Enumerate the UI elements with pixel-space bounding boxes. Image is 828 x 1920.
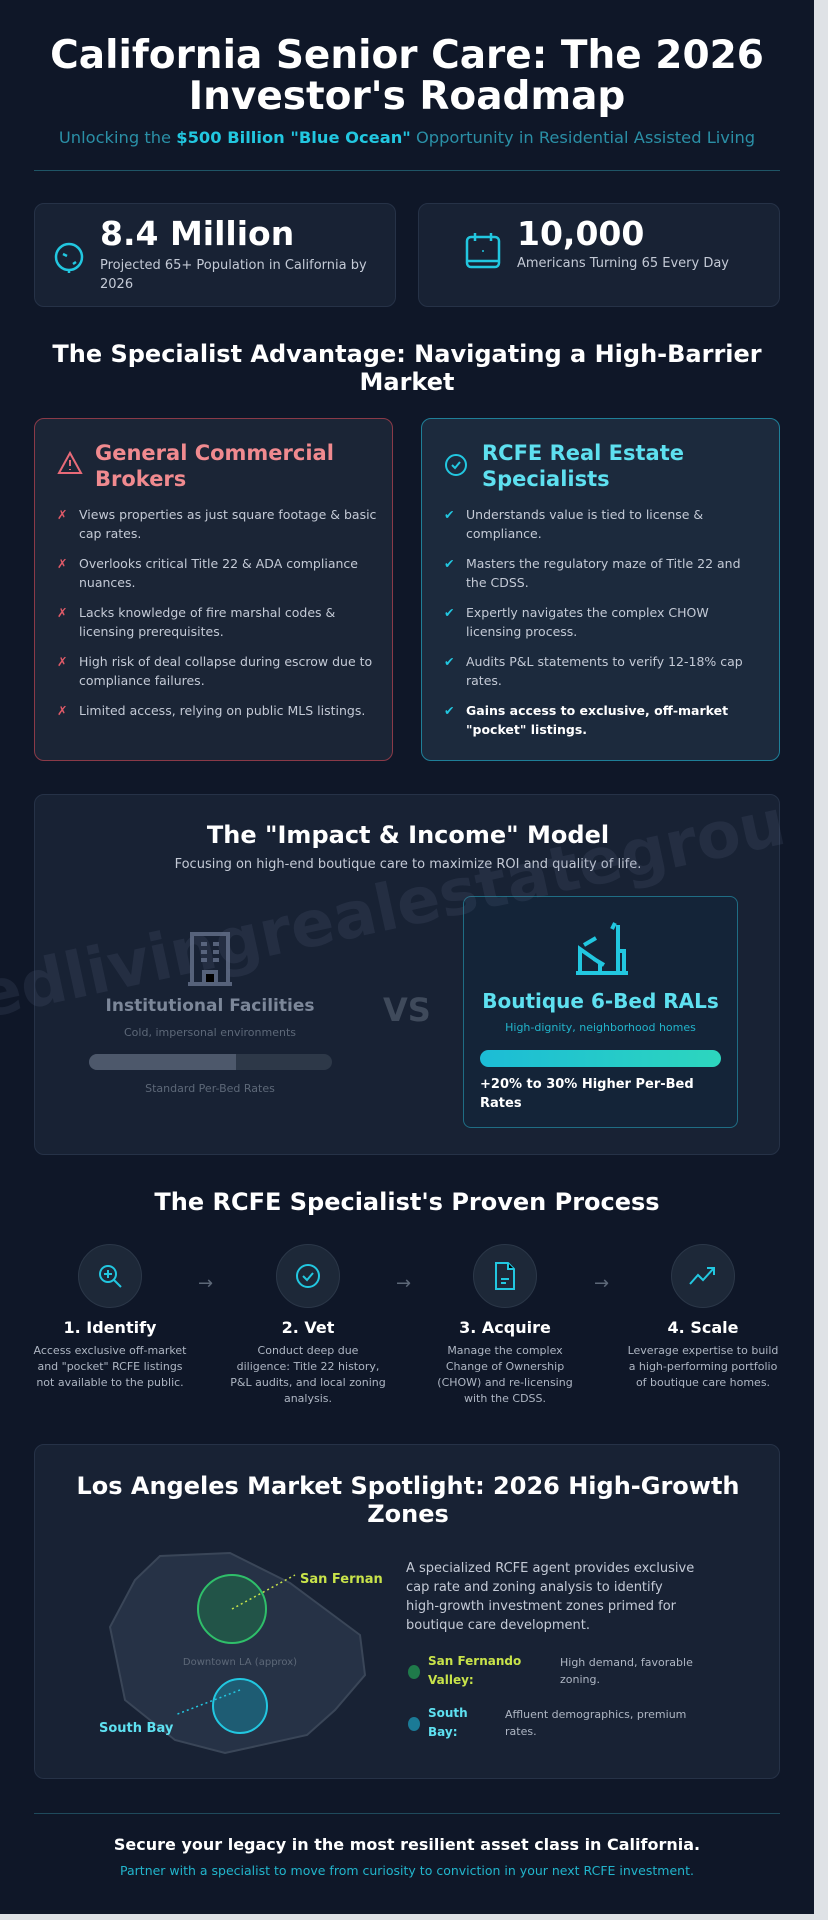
list: broker weaknesses: ✗ — [57, 605, 67, 620]
arrow: → — [198, 1273, 213, 1294]
panel: impact & income — [34, 794, 780, 1155]
title: California Senior Care: The 2026 — [50, 33, 764, 78]
legend: San Fernando — [428, 1654, 521, 1668]
list: specialist strengths: Gains access to exclusive, off-market "pocket" listings. — [466, 703, 728, 737]
icon: check circle — [445, 454, 467, 476]
step 3 acquire: Change of Ownership — [446, 1360, 564, 1373]
step 1 identify: not available to the public. — [36, 1376, 184, 1389]
list: specialist strengths: ✔ — [444, 703, 454, 718]
list: broker weaknesses: Limited access, relying on public MLS listings. — [79, 703, 365, 718]
step 1 identify: and "pocket" RCFE listings — [37, 1360, 183, 1373]
step 3 acquire: with the CDSS. — [464, 1392, 546, 1405]
step 4 scale: 4. Scale — [668, 1318, 738, 1337]
map: South Bay — [99, 1721, 174, 1736]
callout: boutique 6-bed: High-dignity, neighborhood homes — [505, 1021, 696, 1034]
legend: zoning. — [560, 1673, 600, 1686]
heading: specialist advantage: The Specialist Advantage: Navigating a High-Barrier — [52, 340, 762, 368]
heading: impact model: The "Impact & Income" Model — [207, 821, 609, 849]
step 3 acquire: 3. Acquire — [459, 1318, 551, 1337]
step 3 acquire: Manage the complex — [447, 1344, 563, 1357]
legend: South — [428, 1706, 468, 1720]
step 4 scale: of boutique care homes. — [636, 1376, 770, 1389]
heading: specialist advantage: Market — [360, 368, 454, 396]
list: broker weaknesses: ✗ — [57, 556, 67, 571]
step 1 identify: 1. Identify — [64, 1318, 156, 1337]
icon: building — [188, 932, 232, 986]
institutional facilities: Institutional Facilities — [106, 996, 314, 1016]
icon: trend — [671, 1244, 735, 1308]
list: broker weaknesses: Views properties as just square footage & basic cap rates. — [79, 507, 376, 541]
list: broker weaknesses: Overlooks critical Title 22 & ADA compliance nuances. — [79, 556, 358, 590]
footer text: Secure your legacy in the most resilient asset class in California. — [114, 1835, 700, 1854]
list: specialist strengths: ✔ — [444, 605, 454, 620]
stat card: 10,000: 10,000 — [517, 214, 644, 253]
icon: chart house — [576, 922, 628, 975]
list: specialist strengths: ✔ — [444, 556, 454, 571]
map: Downtown LA (approx) — [183, 1657, 297, 1668]
text: LA description: boutique care development. — [406, 1618, 590, 1633]
text: LA description — [406, 1561, 694, 1633]
step 3 acquire: (CHOW) and re-licensing — [437, 1376, 573, 1389]
legend: rates. — [505, 1725, 537, 1738]
list: broker weaknesses: ✗ — [57, 654, 67, 669]
vs: VS — [383, 991, 431, 1029]
step 2 vet: diligence: Title 22 history, — [237, 1360, 379, 1373]
step 2 vet — [230, 1244, 386, 1405]
list: broker weaknesses: ✗ — [57, 703, 67, 718]
panel: RCFE specialists — [421, 418, 780, 761]
legend: Affluent demographics, premium — [505, 1708, 686, 1721]
icon: search — [78, 1244, 142, 1308]
legend: Bay: — [428, 1725, 458, 1739]
step 4 scale: Leverage expertise to build — [628, 1344, 778, 1357]
list: specialist strengths: Masters the regulatory maze of Title 22 and the CDSS. — [466, 556, 741, 590]
step 4 scale — [628, 1244, 778, 1389]
text: LA description: cap rate and zoning analysis to identify — [406, 1580, 663, 1595]
step 1 identify: Access exclusive off-market — [34, 1344, 186, 1357]
heading: LA spotlight — [76, 1472, 740, 1528]
panel: general brokers: Brokers — [95, 467, 186, 491]
panel: RCFE specialists: RCFE Real Estate — [482, 441, 684, 465]
arrow: → — [594, 1273, 609, 1294]
text: LA description: A specialized RCFE agent provides exclusive — [406, 1561, 694, 1576]
step 4 scale: a high-performing portfolio — [629, 1360, 777, 1373]
subtitle: Unlocking the $500 Billion "Blue Ocean" Opportunity in Residential Assisted Living — [59, 128, 755, 147]
legend — [408, 1654, 693, 1739]
map: San Fernan — [300, 1572, 383, 1587]
list: broker weaknesses: ✗ — [57, 507, 67, 522]
stat card: population: Projected 65+ Population in California by 2026 — [100, 258, 367, 292]
arrow: → — [396, 1273, 411, 1294]
list: broker weaknesses — [57, 507, 376, 718]
footer text: Partner with a specialist to move from curiosity to conviction in your next RCFE investment. — [120, 1863, 694, 1878]
institutional facilities — [89, 932, 332, 1095]
stat card: 10,000 — [418, 203, 780, 307]
step 2 vet: P&L audits, and local zoning — [230, 1376, 386, 1389]
list: specialist strengths: ✔ — [444, 654, 454, 669]
step 3 acquire — [437, 1244, 573, 1405]
panel: impact & income: Focusing on high-end boutique care to maximize ROI and quality of life. — [175, 857, 641, 872]
footer text — [114, 1835, 700, 1878]
panel: impact & income: Standard Per-Bed Rates — [145, 1082, 275, 1095]
callout: boutique 6-bed — [463, 896, 738, 1128]
heading: specialist advantage — [52, 340, 762, 396]
panel: general brokers — [34, 418, 393, 761]
list: specialist strengths: ✔ — [444, 507, 454, 522]
panel: general brokers: General Commercial — [95, 441, 334, 465]
callout: boutique 6-bed: +20% to 30% Higher Per-Bed Rates — [480, 1077, 694, 1111]
step 2 vet: Conduct deep due — [258, 1344, 358, 1357]
stat card: population: 8.4 Million — [100, 214, 294, 253]
panel: RCFE specialists: Specialists — [482, 467, 610, 491]
callout: boutique 6-bed: Boutique 6-Bed RALs — [482, 989, 719, 1013]
list: specialist strengths: Understands value is tied to license & compliance. — [466, 507, 703, 541]
heading: LA spotlight: Zones — [367, 1500, 449, 1528]
list: broker weaknesses: High risk of deal collapse during escrow due to compliance failures. — [79, 654, 372, 688]
list: broker weaknesses: Lacks knowledge of fire marshal codes & licensing prerequisites. — [79, 605, 335, 639]
text: LA description: high-growth investment zones primed for — [406, 1599, 676, 1614]
heading: LA spotlight: Los Angeles Market Spotlight: 2026 High-Growth — [76, 1472, 740, 1500]
step 2 vet: analysis. — [284, 1392, 332, 1405]
list: specialist strengths: Audits P&L statements to verify 12-18% cap rates. — [466, 654, 743, 688]
panel: LA spotlight — [34, 1444, 780, 1779]
step 1 identify — [34, 1244, 186, 1389]
heading: proven process: The RCFE Specialist's Proven Process — [154, 1188, 660, 1216]
icon: warning — [57, 451, 83, 474]
list: specialist strengths — [444, 507, 743, 737]
icon: globe — [54, 242, 84, 273]
icon: check — [276, 1244, 340, 1308]
title — [50, 33, 764, 119]
step 2 vet: 2. Vet — [282, 1318, 334, 1337]
icon: document — [473, 1244, 537, 1308]
stat card: population — [34, 203, 396, 307]
icon: calendar — [466, 233, 500, 268]
stat card: 10,000: Americans Turning 65 Every Day — [517, 256, 729, 271]
title: Investor's Roadmap — [189, 74, 625, 119]
legend: High demand, favorable — [560, 1656, 693, 1669]
map — [99, 1552, 383, 1754]
list: specialist strengths: Expertly navigates the complex CHOW licensing process. — [466, 605, 709, 639]
institutional facilities: Cold, impersonal environments — [124, 1026, 296, 1039]
legend: Valley: — [428, 1673, 474, 1687]
